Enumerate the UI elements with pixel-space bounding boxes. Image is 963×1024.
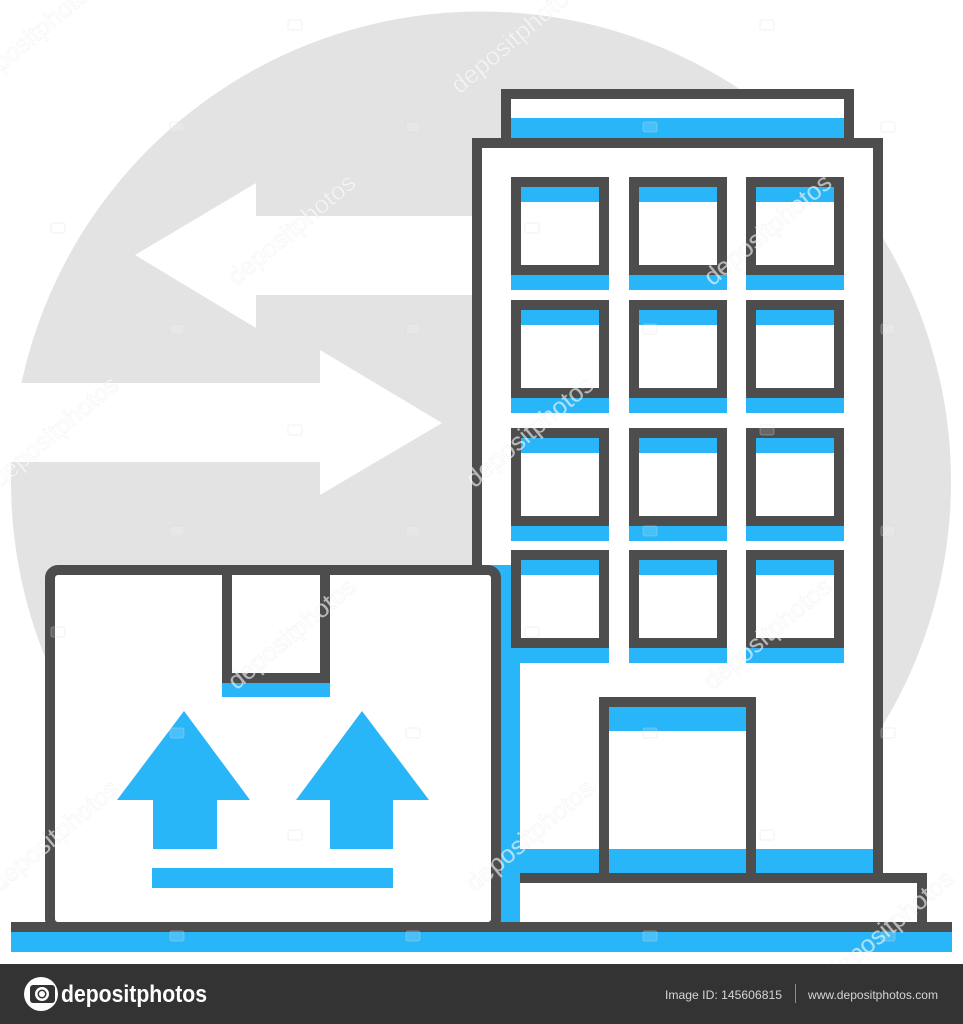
icon: camera logo (24, 977, 58, 1011)
box outline (50, 570, 496, 927)
icon: this way up arrow left (117, 711, 250, 849)
entrance step (520, 878, 922, 927)
arrow: white left arrow (135, 183, 480, 328)
watermarks: depositphotos (698, 572, 837, 695)
ground line (11, 922, 952, 952)
door (604, 702, 751, 882)
watermarks: depositphotos (222, 168, 361, 291)
watermarks: depositphotos (698, 168, 837, 291)
watermarks: depositphotos (222, 572, 361, 695)
watermarks: depositphotos (460, 774, 599, 897)
watermarks: depositphotos (820, 864, 959, 987)
watermarks: depositphotos (460, 370, 599, 493)
website address: www.depositphotos.com (807, 988, 938, 1002)
building roof (501, 89, 854, 144)
window blue shades (511, 187, 844, 663)
watermark camera marks (51, 20, 895, 941)
windows (516, 182, 839, 643)
blue side and base strip (482, 565, 873, 922)
image id: Image ID: 145606815 (665, 988, 782, 1002)
icon: this way up arrow right (296, 711, 429, 849)
arrow: white right arrow (0, 350, 442, 495)
footer separator (795, 984, 796, 1003)
cardboard box (50, 570, 496, 927)
building body (477, 143, 878, 933)
logo wordmark: depositphotos (61, 981, 207, 1008)
box tape (222, 575, 330, 697)
building (477, 89, 922, 933)
icon: this way up bar (152, 868, 393, 888)
footer bar (0, 964, 963, 1024)
